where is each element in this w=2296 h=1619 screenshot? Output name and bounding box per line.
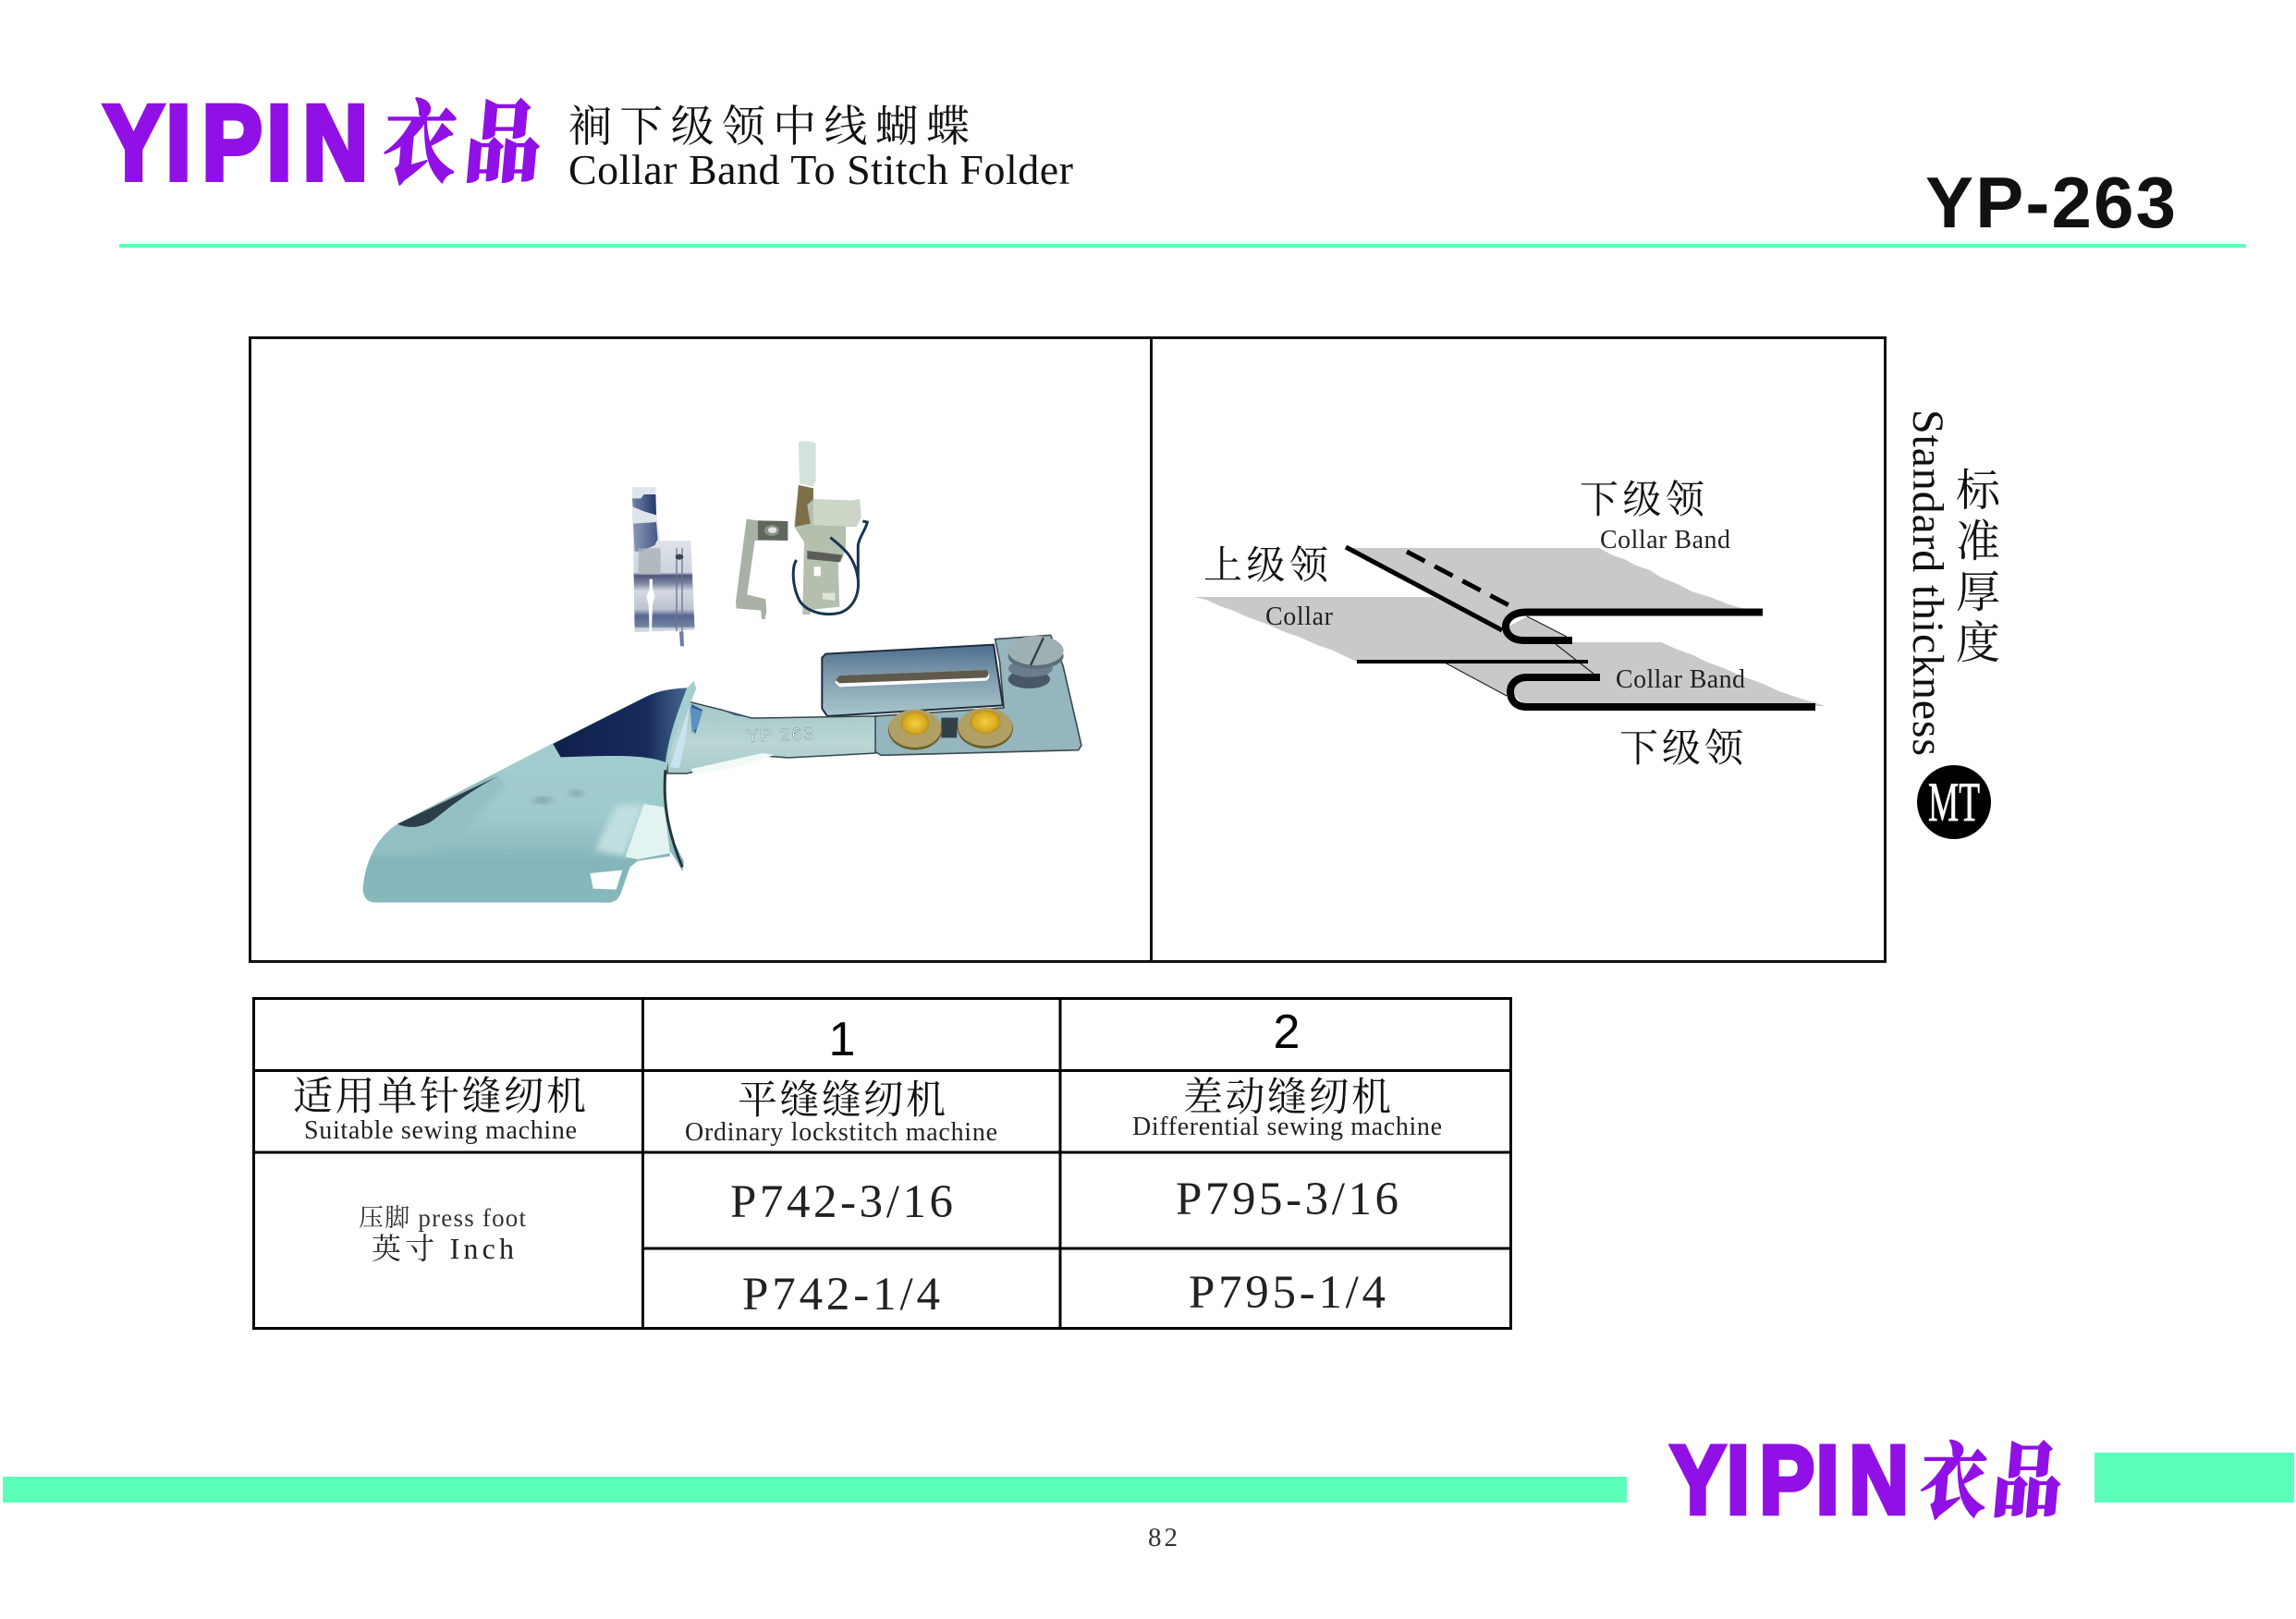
part: arm <box>667 700 875 773</box>
row label: suitable machine: 适用单针缝纫机 <box>293 1076 586 1119</box>
press foot values <box>730 1174 1398 1321</box>
column 1 machine: Ordinary lockstitch machine <box>685 1118 997 1147</box>
diagram label: collar band top: 下级领 <box>1580 479 1705 522</box>
diagram label: collar band bottom: 下级领 <box>1619 727 1744 771</box>
column numbers: 2 <box>1274 1005 1300 1059</box>
part: folder blade <box>363 681 702 903</box>
diagram thin edges <box>1445 616 1594 696</box>
Chinese vertical label: 厚 <box>1956 568 2000 617</box>
diagram label: collar band bottom: Collar Band <box>1616 665 1745 694</box>
title English: Collar Band To Stitch Folder <box>568 146 1073 193</box>
diagram label: collar band bottom <box>1616 665 1745 771</box>
press foot values: P795-1/4 <box>1189 1267 1386 1319</box>
standard thickness label <box>1903 409 2002 839</box>
diagram label: collar band top: Collar Band <box>1600 526 1730 554</box>
part: stamped model mark: YP 263 <box>746 724 813 747</box>
column 2 machine <box>1132 1077 1442 1141</box>
diagram grey fabric <box>1194 548 1826 706</box>
table grid <box>253 998 1511 1329</box>
title Chinese: 裥下级领中线蝴蝶 <box>568 103 970 152</box>
page number: 82 <box>1148 1523 1178 1552</box>
row label: suitable machine <box>293 1076 586 1145</box>
footer bars <box>3 1453 2294 1503</box>
footer wordmark: YIPIN <box>1670 1426 1909 1534</box>
logo wordmark YIPIN: YIPIN <box>104 82 368 202</box>
footer logo <box>1670 1426 2066 1534</box>
column numbers: 1 <box>829 1013 855 1066</box>
press foot values: P795-3/16 <box>1176 1174 1398 1225</box>
column numbers <box>829 1005 1300 1066</box>
diagram: fold cross-section <box>1194 479 1826 771</box>
press foot values: P742-3/16 <box>730 1176 953 1228</box>
header rule <box>119 244 2246 248</box>
press foot values: P742-1/4 <box>742 1269 940 1321</box>
column 2 machine: Differential sewing machine <box>1132 1113 1442 1141</box>
Chinese vertical label: 标 <box>1956 467 2002 516</box>
panel: product and diagram frame <box>250 337 1886 962</box>
table <box>253 998 1511 1329</box>
footer calligraphy: 品 <box>1988 1438 2066 1528</box>
Chinese vertical label: 度 <box>1956 619 2000 668</box>
photo: folder attachment <box>363 635 1081 903</box>
row label: press foot <box>359 1204 526 1265</box>
part: foot with wire guard <box>793 441 867 615</box>
diagram label: collar: Collar <box>1265 603 1334 631</box>
badge MT <box>1917 765 1991 839</box>
part: bracket with plate and screws <box>822 635 1081 755</box>
column 1 machine <box>685 1079 997 1147</box>
part: L bracket <box>736 519 788 619</box>
footer calligraphy: 衣 <box>1916 1437 1991 1529</box>
photo: presser foot parts <box>632 441 867 646</box>
English vertical label: Standard thickness <box>1903 409 1952 756</box>
row label: press foot: 英寸 Inch <box>372 1232 514 1265</box>
model number: YP-263 <box>1925 162 2176 243</box>
logo calligraphy: 品 <box>460 94 546 194</box>
Chinese vertical label <box>1956 467 2002 668</box>
footer calligraphy <box>1916 1437 2066 1529</box>
header logo <box>104 82 546 202</box>
row label: press foot: 压脚 press foot <box>359 1204 526 1232</box>
column 1 machine: 平缝缝纫机 <box>738 1079 946 1123</box>
diagram label: collar: 上级领 <box>1203 544 1329 588</box>
part: clear presser foot <box>632 487 695 646</box>
diagram label: collar band top <box>1580 479 1730 554</box>
diagram solid seam lines <box>1346 547 1815 707</box>
row label: suitable machine: Suitable sewing machine <box>304 1116 577 1145</box>
diagram label: collar <box>1203 544 1334 631</box>
column 2 machine: 差动缝纫机 <box>1183 1077 1391 1120</box>
badge MT: MT <box>1928 772 1980 833</box>
logo calligraphy <box>379 94 546 196</box>
logo calligraphy: 衣 <box>379 95 461 196</box>
Chinese vertical label: 准 <box>1956 517 2000 566</box>
title <box>568 103 1073 193</box>
